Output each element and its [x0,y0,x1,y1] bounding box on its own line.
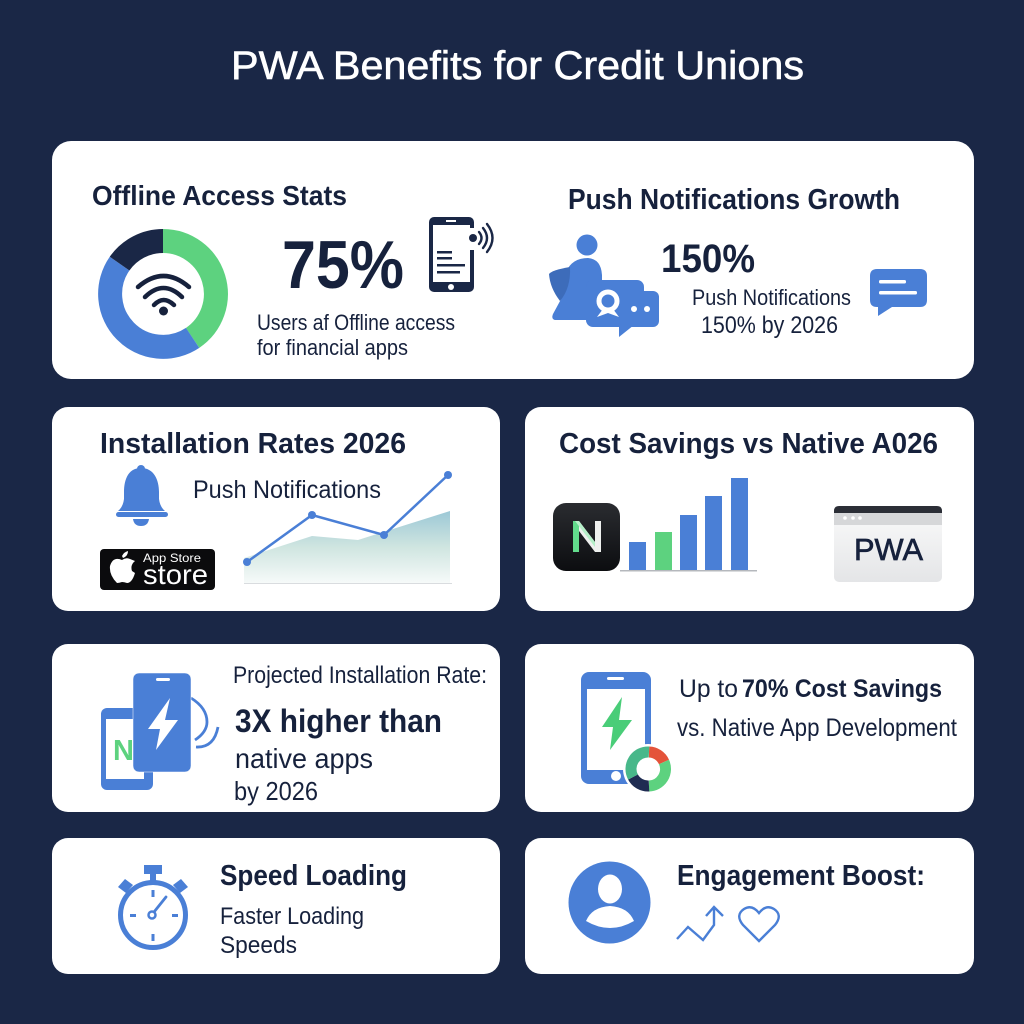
icon: person with chat bubbles [549,234,659,337]
bar chart [620,478,757,572]
icon: stopwatch [118,865,188,948]
text: projected installation rate: 3X higher than [235,703,442,739]
label: push notifications: Push Notifications [193,476,381,504]
text: speed loading: Speeds [220,932,297,959]
icon: phones with bolt [101,673,218,790]
icon: phone with signal [429,217,492,292]
panel: installation rates [52,407,500,611]
text: cost savings [677,675,957,742]
caption: push notifications [692,285,851,339]
caption: offline users: for financial apps [257,335,408,360]
text: speed loading [220,860,407,959]
icon: heart [739,907,779,941]
icon: native app N [553,503,620,571]
panel: 70% cost savings [525,644,974,812]
text: projected installation rate [233,662,487,806]
panel: offline access and push notifications [52,141,974,379]
heading: engagement boost: Engagement Boost: [677,860,925,892]
caption: push notifications: 150% by 2026 [701,312,838,339]
caption: offline users: Users af Offline access [257,310,455,335]
text: cost savings: Up to [679,675,738,703]
text: projected installation rate: by 2026 [234,776,318,806]
icon: bell [116,465,168,526]
heading: installation rates 2026: Installation Rates 2026 [100,428,406,460]
heading: offline access stats: Offline Access Stats [92,180,347,211]
line and area chart [243,471,452,584]
panel: cost savings chart [525,407,974,611]
icon: user avatar [568,862,650,944]
text: cost savings: vs. Native App Development [677,714,957,742]
icon: phone with bolt and ring [581,672,673,794]
statistic: 150%: 150% [661,237,755,281]
badge: app store: store [143,559,208,590]
icon: trend arrow [677,907,723,940]
heading: push notifications growth: Push Notifications Growth [568,184,900,216]
icon: message bubble [870,269,927,316]
panel: speed loading [52,838,500,974]
title: PWA Benefits for Credit Unions [231,44,804,88]
badge: app store [100,549,215,590]
panel: engagement boost [525,838,974,974]
text: cost savings: 70% Cost Savings [742,675,942,703]
text: projected installation rate: Projected Installation Rate: [233,662,487,689]
icon: wifi [138,276,189,316]
caption: push notifications: Push Notifications [692,285,851,310]
donut chart [110,241,216,347]
heading: cost savings vs native: Cost Savings vs Native A026 [559,428,938,460]
badge: app store: App Store [143,553,201,565]
statistic: 75%: 75% [282,227,404,303]
icon: PWA browser window [834,506,942,582]
icon: PWA browser window: PWA [854,532,923,567]
text: speed loading: Speed Loading [220,860,407,892]
panel: projected installation rate [52,644,500,812]
text: speed loading: Faster Loading [220,903,364,930]
text: projected installation rate: native apps [235,743,373,774]
caption: offline users [257,310,455,360]
icon: phones with bolt: N [113,735,134,767]
